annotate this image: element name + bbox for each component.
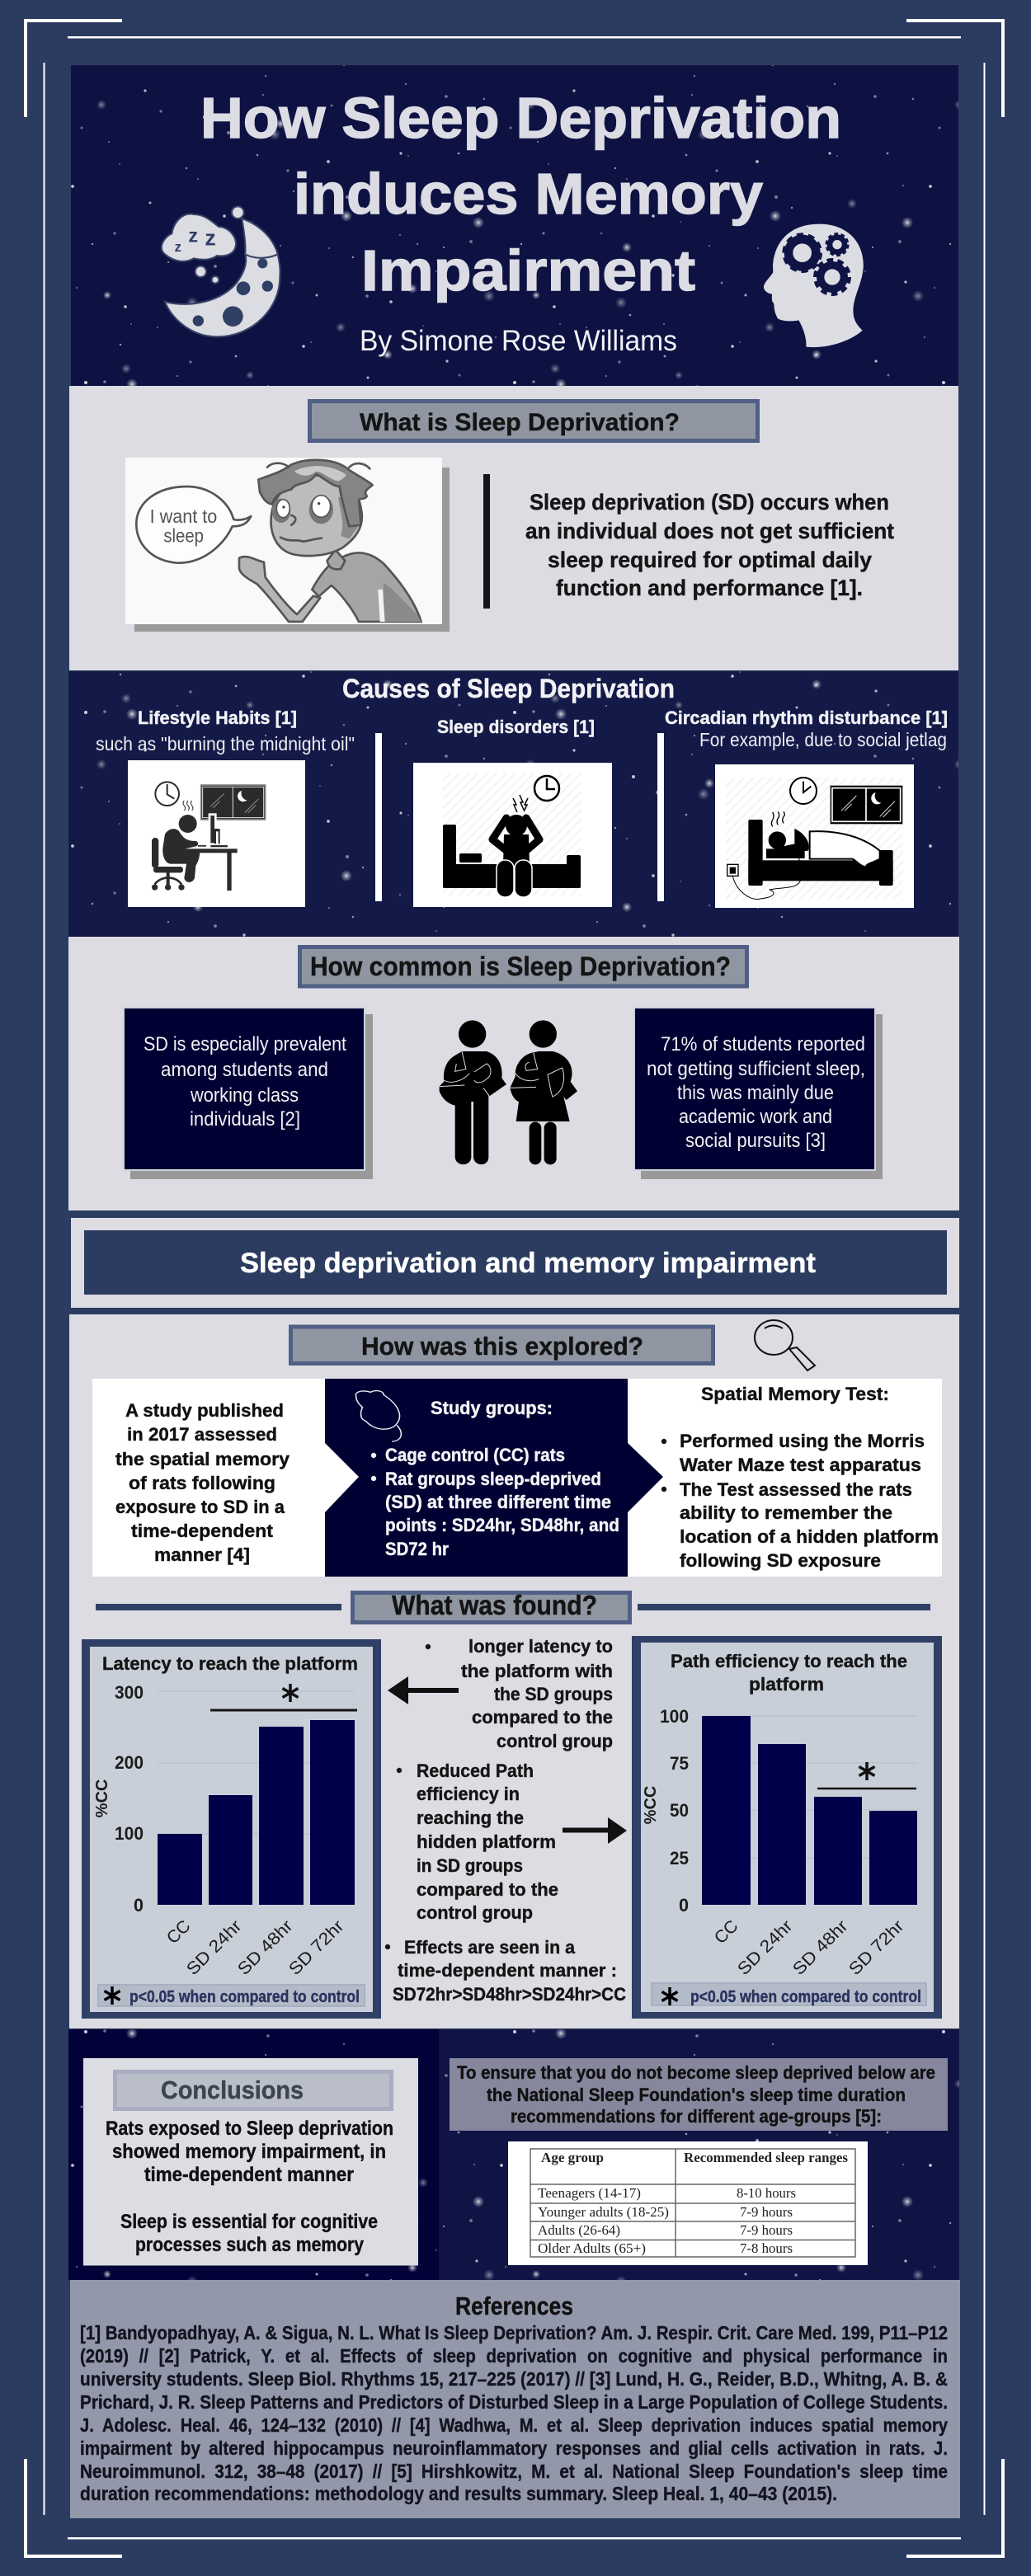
chart: latency to reach the platform: CC — [163, 1916, 195, 1948]
callout: 71 percent of students — [634, 1008, 883, 1179]
title — [200, 86, 841, 303]
text: longer latency: the SD groups — [494, 1684, 613, 1704]
panel: conclusions and recommendations — [68, 2029, 959, 2280]
chart: latency to reach the platform: 300 — [115, 1682, 144, 1703]
heading: causes: Causes of Sleep Deprivation — [342, 674, 675, 703]
arrow: to left chart — [388, 1676, 459, 1704]
table: recommended sleep ranges: 7-9 hours — [740, 2222, 793, 2238]
text: study description: the spatial memory — [115, 1449, 290, 1469]
card: conclusions: Sleep is essential for cognitive — [120, 2211, 378, 2233]
chart: path efficiency to reach the platform: CC — [711, 1916, 742, 1948]
text: longer latency: control group — [497, 1731, 613, 1751]
illustration: tired cartoon boy — [125, 458, 450, 632]
study flow band — [92, 1379, 942, 1577]
chart: latency to reach the platform: %CC — [93, 1779, 111, 1817]
callout: sleep recommendations intro: To ensure that you do not become sleep deprived below are — [457, 2062, 935, 2083]
panel: header — [71, 65, 958, 386]
text: study description: exposure to SD in a — [115, 1497, 285, 1517]
cause: sleep disorders: Sleep disorders [1] — [437, 717, 595, 737]
text: longer latency: compared to the — [472, 1707, 613, 1728]
text: reduced path efficiency: efficiency in — [417, 1784, 520, 1804]
text: reduced path efficiency: Reduced Path — [417, 1760, 534, 1781]
chart: latency to reach the platform: 0 — [134, 1895, 144, 1916]
text: definition: function and performance [1]. — [556, 576, 863, 600]
chart: latency to reach the platform: 200 — [115, 1752, 144, 1773]
icon: sleeping moon — [162, 206, 280, 336]
chart: path efficiency to reach the platform: SD 72hr — [845, 1916, 908, 1979]
text: reduced path efficiency: in SD groups — [417, 1855, 523, 1876]
study groups arrow block — [325, 1379, 663, 1577]
text: time-dependent effects: SD72hr>SD48hr>SD24hr>CC — [393, 1984, 626, 2005]
panel: references: References — [455, 2292, 573, 2320]
heading: how was this explored: How was this explored? — [361, 1332, 643, 1361]
callout: sleep recommendations intro: recommendations for different age-groups [5]: — [511, 2106, 882, 2127]
illustration: tired cartoon boy: sleep — [163, 524, 204, 546]
card: conclusions — [83, 2058, 418, 2266]
chart: latency to reach the platform: 100 — [115, 1823, 144, 1844]
cause: circadian rhythm disturbance: Circadian rhythm disturbance [1] — [665, 707, 948, 728]
panel: how common is sleep deprivation — [68, 937, 959, 1210]
study groups arrow block: (SD) at three different time — [385, 1492, 611, 1512]
cause: lifestyle habits: Lifestyle Habits [1] — [138, 707, 297, 728]
study groups arrow block: SD72 hr — [385, 1539, 449, 1559]
text: spatial memory test: Spatial Memory Test: — [701, 1384, 889, 1404]
chart: path efficiency to reach the platform: 100 — [660, 1706, 689, 1727]
callout: 71 percent of students: social pursuits [3] — [685, 1130, 826, 1152]
chart: path efficiency to reach the platform: %CC — [642, 1786, 660, 1824]
title: Impairment — [361, 238, 695, 303]
reference list: Prichard, J. R. Sleep Patterns and Predictors of Disturbed Sleep in a Large Population of College Students. — [80, 2391, 948, 2413]
heading: what was found — [96, 1590, 930, 1623]
divider bar — [483, 474, 490, 609]
heading: how common: How common is Sleep Deprivation? — [310, 952, 731, 981]
table: recommended sleep ranges: 7-9 hours — [740, 2204, 793, 2220]
callout: prevalence — [124, 1008, 373, 1179]
title: How Sleep Deprivation — [200, 86, 841, 150]
callout: 71 percent of students: not getting sufficient sleep, — [647, 1058, 865, 1080]
card: conclusions: time-dependent manner — [144, 2164, 354, 2186]
table: recommended sleep ranges: Younger adults (18-25) — [538, 2204, 669, 2220]
illustration: tired cartoon boy: I want to — [150, 505, 217, 527]
callout: 71 percent of students: 71% of students reported — [661, 1033, 865, 1055]
text: time-dependent effects — [385, 1937, 626, 2005]
panel: how was this explored and findings — [69, 1314, 959, 2028]
arrow: to right chart — [563, 1817, 627, 1844]
chart: latency to reach the platform: SD 72hr — [285, 1916, 348, 1979]
text: study description: of rats following — [129, 1473, 275, 1493]
text: reduced path efficiency: compared to the — [417, 1879, 558, 1900]
icon: head with gears — [764, 224, 864, 347]
chart: path efficiency to reach the platform: SD 24hr — [734, 1916, 797, 1979]
table: recommended sleep ranges: Age group — [541, 2150, 604, 2165]
text: spatial memory test: following SD exposure — [680, 1550, 881, 1571]
text: study description: A study published — [125, 1400, 284, 1421]
banner: sleep deprivation and memory impairment — [71, 1218, 959, 1308]
callout: prevalence: individuals [2] — [190, 1108, 300, 1131]
text: longer latency: longer latency to — [468, 1636, 613, 1657]
text: definition — [525, 490, 894, 600]
icon: two students — [440, 1020, 577, 1164]
callout: 71 percent of students: academic work and — [679, 1106, 832, 1128]
table: recommended sleep ranges: Recommended sleep ranges — [684, 2150, 848, 2165]
text: longer latency — [426, 1636, 613, 1751]
table: recommended sleep ranges: 8-10 hours — [737, 2185, 796, 2201]
text: definition: sleep required for optimal daily — [548, 548, 872, 572]
reference list: (2019) // [2] Patrick, Y. et al. Effects of sleep deprivation on cognitive and physical performance in — [80, 2345, 948, 2367]
cause: sleep disorders — [413, 717, 612, 907]
reference list: impairment by altered hippocampus neuroinflammatory responses and glial cells activation in rats. J. — [80, 2437, 948, 2459]
cause: circadian rhythm disturbance — [665, 707, 948, 908]
text: spatial memory test: Water Maze test apparatus — [680, 1455, 921, 1475]
study groups arrow block: Cage control (CC) rats — [385, 1445, 565, 1465]
callout: prevalence: SD is especially prevalent — [144, 1033, 346, 1055]
text: spatial memory test: ability to remember the — [680, 1502, 892, 1523]
callout: prevalence: among students and — [161, 1059, 328, 1081]
heading: what is sleep deprivation: What is Sleep Deprivation? — [360, 409, 680, 436]
reference list: Neuroimmunol. 312, 38–48 (2017) // [5] Hirshkowitz, M. et al. National Sleep Foundation's sleep time — [80, 2461, 948, 2482]
reference list: [1] Bandyopadhyay, A. & Sigua, N. L. What Is Sleep Deprivation? Am. J. Respir. Crit. Care Med. 199, P11–P12 — [80, 2322, 948, 2343]
chart: latency to reach the platform — [82, 1639, 381, 2019]
chart: latency to reach the platform: Latency to reach the platform — [102, 1653, 358, 1674]
text: definition: an individual does not get sufficient — [525, 519, 894, 543]
divider — [657, 733, 664, 901]
table: recommended sleep ranges: Teenagers (14-17) — [538, 2185, 641, 2201]
reference list: university students. Sleep Biol. Rhythms 15, 217–225 (2017) // [3] Lund, H. G., Reider, B.D., Whitng, A. B. & — [80, 2368, 948, 2390]
icon: sleeping moon: z — [188, 224, 198, 246]
chart: path efficiency to reach the platform: SD 48hr — [789, 1916, 852, 1979]
chart: path efficiency to reach the platform: platform — [749, 1674, 824, 1695]
icon: mouse — [355, 1391, 401, 1441]
card: conclusions: Conclusions — [161, 2075, 304, 2104]
text: reduced path efficiency — [397, 1760, 558, 1923]
callout: sleep recommendations intro: the National Sleep Foundation's sleep time duration — [487, 2085, 906, 2105]
table: recommended sleep ranges: Adults (26-64) — [538, 2222, 620, 2238]
study groups arrow block: Rat groups sleep-deprived — [385, 1469, 601, 1489]
text: study description — [115, 1400, 290, 1565]
heading: how was this explored — [290, 1327, 713, 1364]
reference list: duration recommendations: methodology and results summary. Sleep Heal. 1, 40–43 (2015). — [80, 2483, 837, 2504]
card: conclusions: Rats exposed to Sleep deprivation — [106, 2118, 393, 2140]
panel: causes of sleep deprivation — [68, 671, 958, 937]
text: study description: manner [4] — [154, 1544, 250, 1565]
text: reduced path efficiency: reaching the — [417, 1807, 524, 1828]
heading: what was found: What was found? — [392, 1590, 597, 1620]
text: study description: in 2017 assessed — [127, 1424, 277, 1445]
text: time-dependent effects: Effects are seen in a — [404, 1937, 576, 1958]
banner: sleep deprivation and memory impairment: Sleep deprivation and memory impairment — [240, 1248, 816, 1279]
callout: 71 percent of students: this was mainly due — [677, 1082, 834, 1104]
table: recommended sleep ranges — [508, 2141, 868, 2265]
card: conclusions: showed memory impairment, in — [112, 2141, 386, 2163]
chart: path efficiency to reach the platform: 50 — [670, 1800, 689, 1821]
text: time-dependent effects: time-dependent manner : — [398, 1960, 617, 1981]
icon: magnifying glass — [755, 1320, 815, 1370]
chart: path efficiency to reach the platform: 25 — [670, 1848, 689, 1869]
author byline: By Simone Rose Williams — [360, 325, 677, 357]
callout: prevalence: working class — [190, 1084, 299, 1107]
panel: what is sleep deprivation — [69, 386, 958, 670]
text: reduced path efficiency: hidden platform — [417, 1831, 556, 1852]
icon: sleeping moon: z — [205, 225, 216, 250]
title: induces Memory — [294, 162, 763, 226]
text: reduced path efficiency: control group — [417, 1902, 533, 1923]
chart: latency to reach the platform: SD 48hr — [234, 1916, 297, 1979]
chart: path efficiency to reach the platform: 75 — [670, 1753, 689, 1774]
chart: path efficiency to reach the platform: p<0.05 when compared to control — [690, 1988, 921, 2006]
cause: circadian rhythm disturbance: For example, due to social jetlag — [699, 729, 947, 750]
study groups arrow block: Study groups: — [431, 1398, 553, 1418]
text: spatial memory test: Performed using the Morris — [680, 1431, 925, 1451]
study groups arrow block: points : SD24hr, SD48hr, and — [385, 1515, 619, 1535]
table: recommended sleep ranges: Older Adults (65+) — [538, 2240, 646, 2256]
icon: sleeping moon: z — [175, 239, 181, 255]
chart: path efficiency to reach the platform — [632, 1636, 942, 2019]
reference list — [80, 2322, 948, 2504]
heading: what is sleep deprivation — [310, 401, 757, 440]
panel: references — [70, 2280, 960, 2518]
chart: path efficiency to reach the platform: Path efficiency to reach the — [671, 1651, 907, 1671]
cause: lifestyle habits — [96, 707, 355, 907]
text: spatial memory test — [661, 1384, 939, 1571]
table: recommended sleep ranges: 7-8 hours — [740, 2240, 793, 2256]
chart: latency to reach the platform: p<0.05 when compared to control — [129, 1988, 360, 2006]
card: conclusions: processes such as memory — [135, 2234, 365, 2256]
text: spatial memory test: location of a hidden platform — [680, 1526, 939, 1547]
callout: sleep recommendations intro — [450, 2058, 948, 2131]
text: study description: time-dependent — [131, 1521, 274, 1541]
cause: lifestyle habits: such as "burning the midnight oil" — [96, 733, 355, 754]
text: longer latency: the platform with — [461, 1661, 613, 1681]
chart: path efficiency to reach the platform: 0 — [679, 1895, 689, 1916]
text: definition: Sleep deprivation (SD) occurs when — [530, 490, 889, 515]
divider — [375, 733, 382, 901]
chart: latency to reach the platform: SD 24hr — [183, 1916, 246, 1979]
text: spatial memory test: The Test assessed the rats — [680, 1479, 912, 1500]
